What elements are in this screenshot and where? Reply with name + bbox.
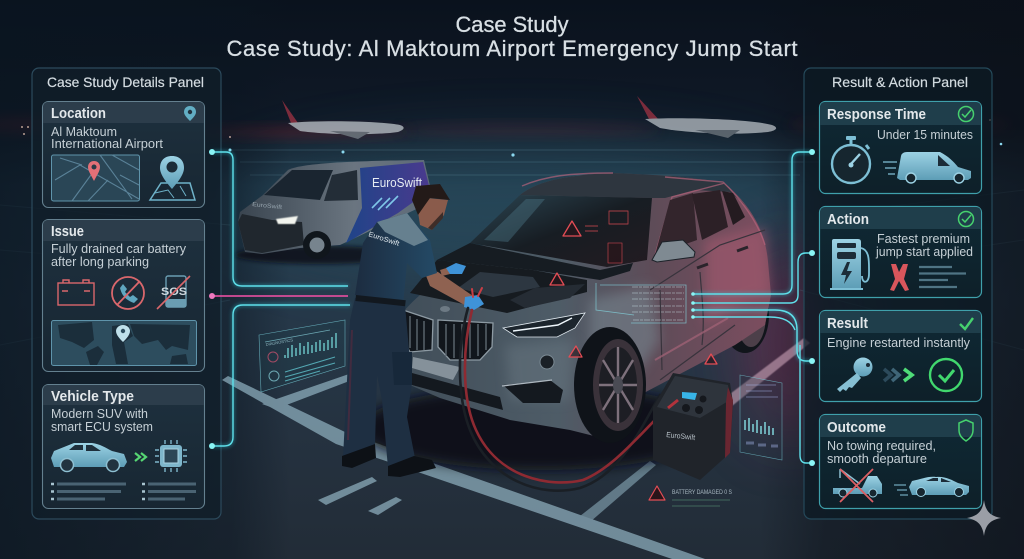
card: Response Time: Under 15 minutes	[877, 128, 973, 142]
gloves	[464, 295, 484, 310]
card: Action	[820, 206, 982, 298]
world map with pin	[52, 320, 196, 366]
sparkle watermark	[967, 500, 1001, 536]
raised hood	[433, 243, 633, 280]
icon: green success ring	[930, 359, 962, 391]
card: Result: Result	[827, 316, 868, 332]
body colour highlights	[505, 228, 770, 400]
car body	[403, 173, 771, 440]
EuroSwift jump starter pack	[653, 373, 733, 480]
icon: departing car	[894, 477, 969, 496]
card: Vehicle Type	[42, 384, 204, 508]
arm reaching to the battery	[423, 268, 476, 308]
icon: tow truck crossed out	[833, 469, 882, 502]
title	[226, 12, 798, 61]
icon: shield	[959, 420, 973, 441]
torso	[355, 213, 437, 305]
heading: details panel: Case Study Details Panel	[47, 74, 204, 90]
icon: green tick	[960, 318, 973, 329]
icon: street map	[52, 155, 140, 201]
headlight	[503, 313, 585, 337]
card: Location	[42, 102, 204, 208]
connector lines: left panel to scene	[209, 149, 350, 449]
icon: ECU chip	[155, 440, 187, 472]
card: Vehicle Type: Vehicle Type	[51, 389, 134, 405]
windshield	[470, 195, 652, 267]
icon: response van	[883, 152, 971, 183]
icon: SOS phone crossed out: SOS	[161, 286, 187, 298]
card: Location: Al Maktoum	[51, 125, 117, 139]
rear wheel	[721, 277, 769, 353]
card: Outcome: No towing required,	[827, 439, 936, 453]
icon: EV charger	[830, 239, 869, 290]
mechanic in EuroSwift uniform: EuroSwift	[367, 231, 400, 248]
card: Action: Action	[827, 212, 869, 228]
icon: green check	[958, 106, 974, 122]
icon: progress chevrons	[884, 369, 912, 381]
grille right kidney	[438, 320, 493, 360]
card: Outcome: Outcome	[827, 420, 886, 436]
heading: result panel: Result & Action Panel	[832, 74, 968, 90]
card: Result	[820, 310, 982, 402]
title: Case Study	[456, 12, 568, 37]
icon: red jump clamp	[890, 264, 909, 291]
card: Issue: after long parking	[51, 255, 149, 269]
SUV with open hood	[360, 173, 771, 470]
panel: Result and Action	[804, 68, 992, 519]
card: Issue: Issue	[51, 224, 84, 240]
runway and parking bay markings	[222, 374, 705, 559]
icon: small pin	[184, 106, 196, 121]
icon: SOS phone crossed out	[157, 276, 190, 309]
icon: SUV	[51, 443, 127, 472]
card: Issue	[42, 220, 204, 372]
card: Location: International Airport	[51, 137, 164, 151]
side windows	[655, 190, 745, 255]
text lines	[919, 267, 966, 287]
card: Issue: Fully drained car battery	[51, 242, 187, 256]
engine bay	[410, 260, 587, 313]
front wheel	[574, 327, 646, 443]
warning readout on the ground	[649, 486, 732, 506]
warning readout on the ground: BATTERY DAMAGED 0 S	[672, 490, 732, 496]
card: Vehicle Type: Modern SUV with	[51, 407, 148, 421]
card: Response Time: Response Time	[827, 107, 926, 123]
EuroSwift jump starter pack: EuroSwift	[666, 430, 696, 442]
card: Response Time	[820, 102, 982, 194]
dark roof	[520, 173, 745, 205]
EuroSwift service van	[235, 160, 431, 264]
card: Outcome	[820, 414, 982, 508]
left hologram dashboard	[259, 320, 345, 392]
door seams and handles	[650, 230, 765, 380]
hologram data overlay on car door	[596, 283, 686, 323]
left hologram dashboard: DIAGNOSTICS	[265, 337, 294, 347]
airplane: left	[282, 100, 404, 139]
EuroSwift service van: EuroSwift	[252, 202, 283, 211]
icon: green check	[958, 212, 974, 226]
roof rail highlight	[522, 173, 765, 255]
bmw badge	[440, 306, 450, 312]
jump leads	[460, 288, 677, 491]
bumper details	[412, 355, 563, 410]
icon: chevron arrow	[135, 453, 146, 461]
connector lines: right panel to scene	[691, 149, 815, 466]
airplane: right	[637, 96, 776, 138]
card: Location: Location	[51, 106, 106, 122]
warning indicators on the car	[550, 211, 717, 364]
glowing pink light band	[722, 338, 810, 406]
card: Result: Engine restarted instantly	[827, 336, 971, 350]
icon: no phone	[112, 277, 144, 309]
spec lines	[51, 484, 196, 499]
icon: stopwatch	[832, 136, 870, 183]
mechanic in EuroSwift uniform	[342, 184, 484, 477]
icon: car key	[837, 358, 872, 392]
icon: pin on folded map	[150, 156, 195, 200]
title: Case Study: Al Maktoum Airport Emergency Jump Start	[226, 36, 798, 61]
shoes	[342, 444, 376, 468]
card: Vehicle Type: smart ECU system	[51, 420, 153, 434]
grille left kidney	[403, 310, 433, 352]
icon: dead battery	[58, 280, 94, 305]
EuroSwift service van: EuroSwift	[372, 175, 422, 190]
card: Action: jump start applied	[875, 245, 973, 259]
side mirror	[652, 240, 695, 262]
card: Outcome: smooth departure	[827, 452, 927, 466]
panel: Case Study Details	[32, 68, 221, 519]
trousers	[343, 298, 415, 468]
head	[412, 184, 450, 230]
card: Action: Fastest premium	[877, 232, 970, 246]
right hologram readout	[740, 375, 782, 460]
